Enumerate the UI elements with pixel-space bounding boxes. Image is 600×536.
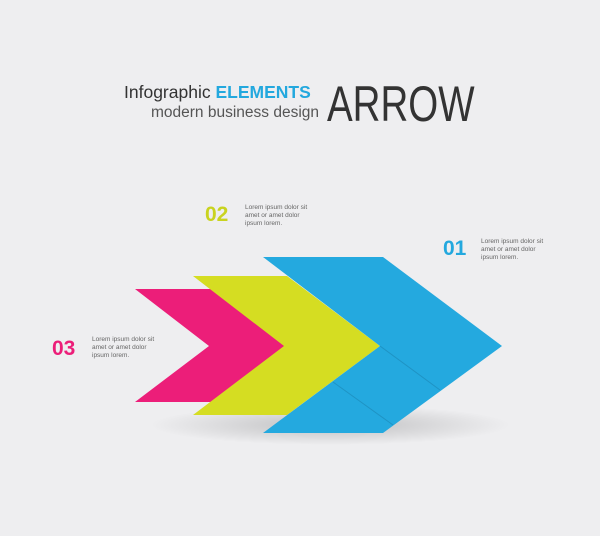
arrow 02 yellow: [193, 276, 380, 415]
label 03: 03: [52, 337, 75, 360]
label 01: amet or amet dolor: [481, 246, 536, 253]
ARROW word: ARROW: [327, 76, 475, 132]
label 03: Lorem ipsum dolor sit: [92, 336, 154, 343]
label 02: ipsum lorem.: [245, 220, 282, 227]
label 02: amet or amet dolor: [245, 212, 300, 219]
shadow: [150, 405, 510, 445]
label 03: ipsum lorem.: [92, 352, 129, 359]
label 02: [205, 203, 308, 227]
title: [124, 76, 475, 132]
label 01: 01: [443, 237, 466, 260]
arrow 01 blue: [263, 257, 502, 433]
label 02: 02: [205, 203, 228, 226]
label 01: ipsum lorem.: [481, 254, 518, 261]
label 03: [52, 336, 154, 360]
label 01: [443, 237, 544, 261]
subtitle: modern business design: [151, 104, 319, 121]
label 03: amet or amet dolor: [92, 344, 147, 351]
arrow 03 pink: [135, 289, 290, 402]
label 02: Lorem ipsum dolor sit: [245, 204, 307, 211]
title line 1: Infographic ELEMENTS: [124, 82, 311, 102]
label 01: Lorem ipsum dolor sit: [481, 238, 543, 245]
